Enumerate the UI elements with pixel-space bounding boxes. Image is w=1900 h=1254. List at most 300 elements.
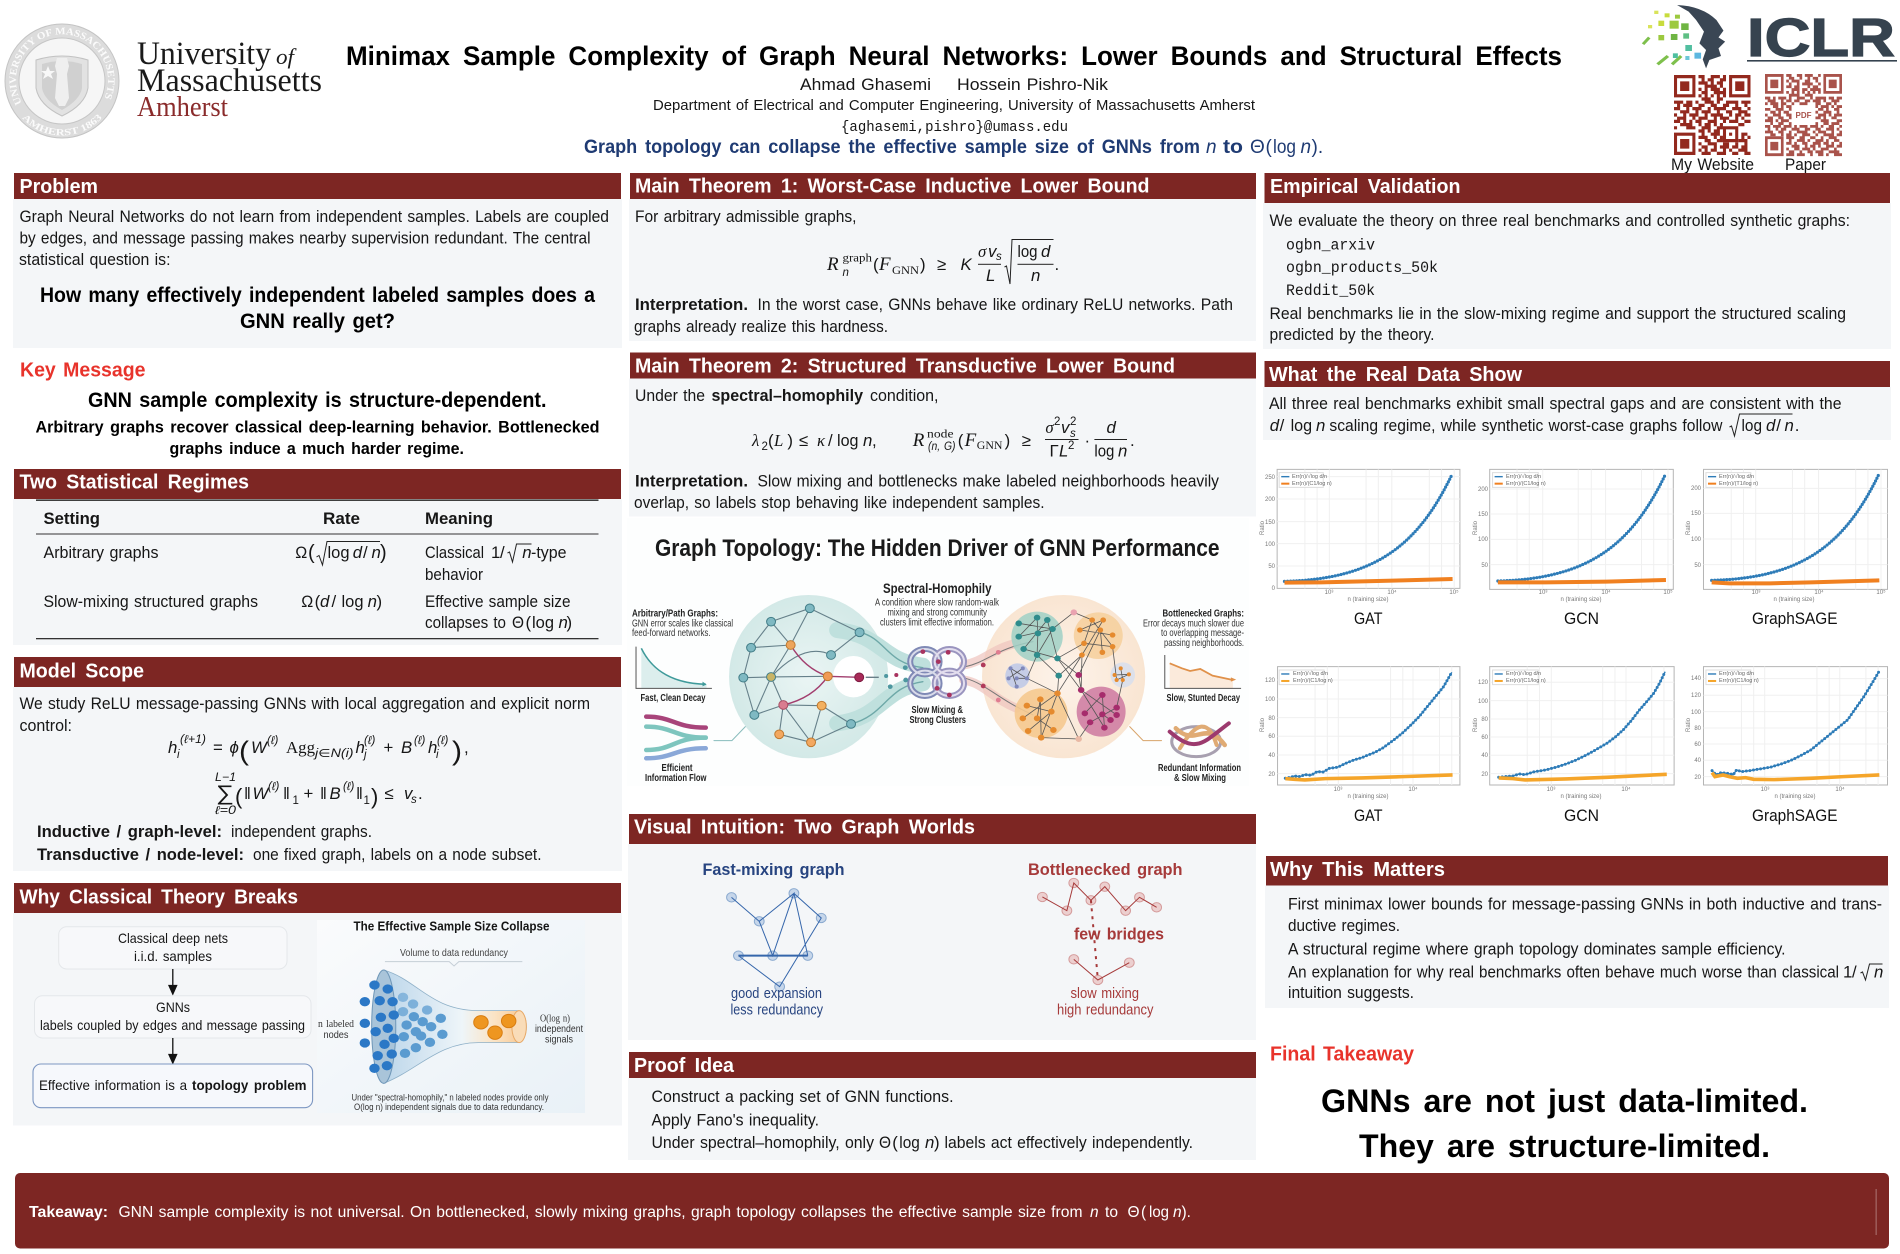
formula: structured lower bound: d bbox=[1106, 418, 1116, 437]
axis labels: 80 bbox=[1694, 726, 1702, 732]
formula: structured lower bound: L bbox=[1059, 442, 1068, 460]
formula: message passing update: (ℓ) bbox=[437, 735, 449, 747]
text: transductive setting bbox=[37, 845, 542, 864]
text: condition intro: spectral–homophily bbox=[712, 386, 864, 405]
left annotation: arbitrary path graphs: GNN error scales like classical bbox=[632, 618, 733, 630]
text: interpretation 1 bbox=[634, 295, 1233, 336]
footer text: n bbox=[1173, 1204, 1182, 1221]
table row: arbitrary graphs: -type bbox=[531, 543, 566, 562]
formula: message passing update: + bbox=[384, 738, 393, 757]
axis labels: 20 bbox=[1481, 772, 1489, 778]
axis labels bbox=[1260, 670, 1418, 800]
table row: slow-mixing graphs: ( bbox=[315, 592, 321, 611]
text: inductive setting: independent graphs. bbox=[231, 822, 372, 841]
tagline: Graph topology can collapse the effective sample size of GNNs from bbox=[584, 137, 1200, 158]
graph: bottlenecked bbox=[1028, 860, 1182, 1018]
text: inductive setting: Inductive / graph-level: bbox=[37, 822, 222, 841]
right annotation: bottlenecked graphs: Bottlenecked Graphs: bbox=[1162, 608, 1244, 620]
formula: spectral gap condition: κ bbox=[817, 431, 826, 450]
formula: worst-case lower bound: K bbox=[960, 255, 972, 274]
text: real data findings: n bbox=[1316, 416, 1325, 435]
text: reason 1: ductive regimes. bbox=[1288, 916, 1400, 935]
text: evaluation summary bbox=[1270, 304, 1846, 344]
axis labels bbox=[1260, 473, 1459, 603]
formula: worst-case lower bound: L bbox=[986, 266, 995, 285]
text: reason 1 bbox=[1288, 894, 1882, 935]
formula: structured lower bound: R bbox=[912, 430, 925, 451]
logo: University of Massachusetts Amherst wordmark bbox=[137, 36, 322, 123]
chart: GAT real data bbox=[1260, 469, 1460, 628]
axis labels: 50 bbox=[1694, 563, 1702, 569]
axis labels: n (training size) bbox=[1773, 597, 1815, 603]
panel: Model Scope bbox=[13, 657, 622, 871]
formula: worst-case lower bound: log bbox=[1018, 242, 1038, 261]
axis labels: Ratio bbox=[1260, 520, 1266, 535]
title: Minimax Sample Complexity of Graph Neural Networks: Lower Bounds and Structural Effects bbox=[346, 41, 1562, 71]
figure: Graph Topology the Hidden Driver bbox=[627, 518, 1249, 786]
tagline: to bbox=[1223, 137, 1243, 158]
heading: Final Takeaway: Final Takeaway bbox=[1270, 1042, 1415, 1066]
right annotation: bottlenecked graphs: passing neighborhoods. bbox=[1164, 637, 1244, 649]
formula: spectral gap condition: log bbox=[837, 431, 858, 450]
table row: arbitrary graphs: Classical bbox=[425, 543, 484, 562]
formula: structured lower bound: ) bbox=[1005, 431, 1010, 450]
axis labels: 40 bbox=[1481, 753, 1489, 759]
formula: norm constraint: ‖ bbox=[244, 784, 251, 803]
formula: message passing update: ( bbox=[239, 736, 249, 766]
formula: message passing update: (ℓ) bbox=[414, 735, 426, 747]
axis labels: Ratio bbox=[1260, 717, 1266, 732]
label: efficient information flow bbox=[645, 762, 707, 784]
text: real data findings: scaling regime, while synthetic worst-case graphs follow bbox=[1329, 416, 1723, 435]
email: {aghasemi,pishro}@umass.edu bbox=[841, 120, 1068, 136]
table: regimes bbox=[36, 500, 598, 639]
text: problem statement bbox=[19, 207, 609, 269]
left annotation: arbitrary path graphs: Arbitrary/Path Graphs: bbox=[632, 608, 718, 620]
formula: message passing update: h bbox=[356, 738, 365, 757]
text: interpretation 1: In the worst case, GNNs behave like ordinary ReLU networks. Path bbox=[758, 295, 1233, 314]
formula: structured lower bound: node bbox=[927, 428, 954, 440]
text: real data findings: d bbox=[1766, 416, 1776, 435]
QR code: My Website: My Website bbox=[1671, 155, 1754, 174]
QR code: Paper bbox=[1765, 74, 1842, 174]
list: benchmarks bbox=[1286, 236, 1438, 300]
formula: worst-case lower bound: GNN bbox=[892, 265, 920, 277]
text: interpretation 1: Interpretation. bbox=[635, 295, 748, 314]
logo: UMass seal: AMHERST 1863 bbox=[22, 114, 102, 136]
right annotation: bottlenecked graphs: Error decays much slower due bbox=[1143, 618, 1244, 630]
formula: spectral gap condition: 2 bbox=[762, 441, 768, 453]
formula: structured lower bound: F bbox=[964, 430, 977, 451]
axis labels: 50 bbox=[1481, 563, 1489, 569]
graph: fast-mixing: Fast-mixing graph bbox=[702, 860, 844, 879]
left annotation: arbitrary path graphs bbox=[632, 608, 733, 639]
axis labels: 100 bbox=[1265, 697, 1276, 703]
text: interpretation 2: Slow mixing and bottlenecks make labeled neighborhoods heavily bbox=[758, 472, 1220, 490]
logo: UMass seal: UNIVERSITY OF MASSACHUSETTS bbox=[10, 28, 115, 106]
formula: norm constraint: ‖ bbox=[283, 784, 290, 803]
formula: message passing update: W bbox=[251, 738, 269, 757]
panel: Final Takeaway bbox=[1270, 1042, 1808, 1164]
text: interpretation 1: graphs already realize this hardness. bbox=[634, 317, 888, 336]
QR code: Paper: PDF bbox=[1796, 111, 1812, 120]
text: evaluation intro: We evaluate the theory on three real benchmarks and controlled synthetic graphs: bbox=[1270, 211, 1850, 230]
tagline: ( bbox=[1266, 137, 1272, 158]
formula: norm constraint: ∑ bbox=[216, 782, 234, 805]
formula: structured lower bound: 2 bbox=[1070, 416, 1076, 428]
formula: worst-case lower bound: F bbox=[878, 254, 891, 275]
formula: message passing update: j bbox=[362, 749, 367, 761]
text: model description: control: bbox=[20, 716, 72, 735]
formula: message passing update: ) bbox=[452, 736, 462, 766]
axis labels: 80 bbox=[1268, 716, 1276, 722]
formula: norm constraint: ) bbox=[371, 784, 378, 809]
tagline: n bbox=[1300, 137, 1311, 158]
formula: norm constraint: ≤ bbox=[384, 784, 394, 803]
caption: GAT bbox=[1354, 609, 1382, 628]
table row: arbitrary graphs: n bbox=[372, 543, 381, 562]
table row: slow-mixing graphs: n bbox=[558, 613, 568, 632]
formula: norm constraint: . bbox=[418, 784, 423, 803]
axis labels: n (training size) bbox=[1347, 794, 1389, 800]
axis labels: 0 bbox=[1272, 586, 1276, 592]
callout: final statement bbox=[1321, 1083, 1808, 1164]
panel: Proof Idea bbox=[628, 1052, 1256, 1160]
formula: spectral gap condition: n bbox=[863, 431, 872, 450]
left network: fast mixing graph bbox=[739, 604, 879, 747]
logo: University of Massachusetts Amherst wordmark: Massachusetts bbox=[137, 63, 322, 99]
formula: spectral gap condition: / bbox=[828, 431, 833, 450]
axis labels bbox=[1686, 670, 1845, 800]
formula: spectral gap condition: ) bbox=[787, 431, 793, 450]
table row: slow-mixing graphs: Effective sample size bbox=[425, 592, 570, 611]
axis labels: 10³ bbox=[1761, 787, 1769, 793]
callout: central question: GNN really get? bbox=[240, 310, 395, 333]
formula: structured lower bound: Γ bbox=[1050, 442, 1059, 460]
formula: structured lower bound: v bbox=[1061, 418, 1071, 437]
table row: slow-mixing graphs: ( bbox=[526, 613, 532, 632]
table row: arbitrary graphs bbox=[44, 542, 566, 584]
formula: worst-case lower bound: d bbox=[1041, 242, 1051, 261]
text: interpretation 2: Interpretation. bbox=[635, 472, 748, 490]
central knot: slow mixing and strong clusters bbox=[884, 649, 1001, 702]
flow box: classical deep nets bbox=[59, 927, 287, 969]
formula: worst-case lower bound: ( bbox=[873, 255, 879, 274]
axis labels: 10⁵ bbox=[1876, 589, 1886, 596]
axis labels: 200 bbox=[1478, 487, 1489, 493]
formula: spectral gap condition: L bbox=[773, 431, 783, 450]
axis labels: 120 bbox=[1691, 693, 1702, 699]
axis labels: 10⁴ bbox=[1387, 589, 1397, 596]
axis labels: 100 bbox=[1691, 537, 1702, 543]
table header row: Meaning bbox=[425, 509, 493, 528]
heading: Problem: Problem bbox=[20, 175, 98, 198]
text: statement intro: For arbitrary admissible graphs, bbox=[635, 207, 856, 226]
text: condition intro: condition, bbox=[870, 386, 938, 405]
formula: worst-case lower bound: n bbox=[842, 267, 849, 279]
axis labels: 10⁴ bbox=[1835, 786, 1845, 793]
formula: norm constraint: + bbox=[304, 784, 313, 803]
label: slow stunted decay: Slow, Stunted Decay bbox=[1166, 692, 1240, 704]
text: proof step 3: Under spectral–homophily, only bbox=[652, 1133, 875, 1152]
heading: Visual Intuition: Visual Intuition: Two Graph Worlds bbox=[634, 816, 975, 839]
authors bbox=[800, 75, 1109, 94]
text: reason 3: / bbox=[1852, 962, 1857, 982]
left annotation: arbitrary path graphs: feed-forward networks. bbox=[632, 627, 710, 639]
heading: Why This Matters: Why This Matters bbox=[1270, 858, 1445, 881]
axis labels: 60 bbox=[1481, 735, 1489, 741]
axis labels: 50 bbox=[1268, 564, 1276, 570]
table header row: Rate bbox=[323, 509, 360, 528]
formula: norm constraint: B bbox=[330, 784, 341, 803]
text: problem statement: Graph Neural Networks do not learn from independent samples. Labels are coupled bbox=[20, 207, 609, 226]
authors: Ahmad Ghasemi bbox=[800, 75, 931, 94]
QR code: Paper: Paper bbox=[1785, 155, 1826, 174]
formula: structured lower bound: ≥ bbox=[1022, 431, 1031, 450]
text: real data findings: log bbox=[1742, 416, 1762, 435]
callout: final statement: They are structure-limited. bbox=[1359, 1128, 1770, 1164]
panel: Two Statistical Regimes bbox=[13, 469, 622, 645]
formula: spectral gap condition: ≤ bbox=[799, 431, 808, 450]
flow box: GNNs: GNNs bbox=[156, 999, 190, 1015]
axis labels: 120 bbox=[1478, 680, 1489, 686]
text: proof step 2: Apply Fano's inequality. bbox=[652, 1110, 819, 1130]
table row: arbitrary graphs: Arbitrary graphs bbox=[44, 543, 158, 562]
formula: norm constraint: W bbox=[252, 784, 270, 803]
text: problem statement: statistical question is: bbox=[19, 250, 170, 269]
table row: slow-mixing graphs: collapses to bbox=[425, 613, 506, 632]
axis labels: 10⁴ bbox=[1621, 786, 1631, 793]
tagline: n bbox=[1206, 137, 1217, 158]
orange independent signals bbox=[474, 1014, 516, 1039]
axis labels: Err(n)/(C1/log n) bbox=[1293, 678, 1333, 684]
axis labels: 150 bbox=[1691, 511, 1702, 517]
formula: norm constraint: L−1 bbox=[215, 772, 236, 784]
formula: norm constraint: ℓ=0 bbox=[214, 805, 237, 817]
central heading: Spectral-Homophily: clusters limit effective information. bbox=[880, 616, 994, 628]
formula: structured lower bound: GNN bbox=[977, 440, 1003, 452]
axis labels: Ratio bbox=[1686, 520, 1692, 535]
graph: bottlenecked: slow mixing bbox=[1070, 986, 1139, 1002]
text: proof step 3: Θ bbox=[879, 1133, 891, 1152]
table row: arbitrary graphs: log bbox=[328, 543, 350, 562]
table row: slow-mixing graphs: log bbox=[342, 592, 364, 611]
callout: central question bbox=[40, 284, 595, 333]
formula: worst-case lower bound: R bbox=[826, 254, 839, 275]
graph: bottlenecked: few bridges bbox=[1074, 924, 1164, 944]
footer text: to bbox=[1105, 1204, 1118, 1221]
graph: bottlenecked: high redundancy bbox=[1057, 1002, 1154, 1018]
label: O(log n) independent signals: O(log n) bbox=[540, 1012, 570, 1024]
text: inductive setting bbox=[37, 822, 372, 841]
axis labels: 20 bbox=[1694, 775, 1702, 781]
formula: norm constraint: ‖ bbox=[320, 784, 327, 803]
formula: structured lower bound: . bbox=[1130, 431, 1135, 450]
axis labels: 10³ bbox=[1539, 590, 1547, 596]
text: key message detail: Arbitrary graphs recover classical deep-learning behavior. Bottlenecked bbox=[36, 418, 600, 436]
footer text: Takeaway: bbox=[29, 1204, 108, 1221]
formula: worst-case lower bound bbox=[826, 240, 1059, 285]
figure caption bbox=[352, 1092, 549, 1113]
icon: redundant information knot bbox=[1130, 723, 1229, 757]
label: n labeled nodes: nodes bbox=[324, 1029, 348, 1041]
text: proof step 3: ( bbox=[892, 1133, 898, 1152]
heading: Model Scope: Model Scope bbox=[20, 660, 144, 683]
formula: worst-case lower bound: ≥ bbox=[937, 255, 946, 274]
axis labels: 10³ bbox=[1547, 787, 1555, 793]
text: real data findings: . bbox=[1795, 416, 1799, 435]
axis labels: 100 bbox=[1265, 542, 1276, 548]
graph: fast-mixing bbox=[702, 860, 844, 1018]
axis labels: 20 bbox=[1268, 772, 1276, 778]
text: problem statement: by edges, and message passing makes nearby supervision redundant. The central bbox=[20, 228, 590, 248]
heading: Main Theorem 1: Main Theorem 1: Worst-Case Inductive Lower Bound bbox=[635, 175, 1150, 198]
label: efficient information flow: Efficient bbox=[662, 762, 693, 774]
table row: arbitrary graphs: ) bbox=[380, 542, 387, 564]
central heading: Spectral-Homophily bbox=[875, 581, 1000, 628]
heading: What the Real Data Show: What the Real Data Show bbox=[1269, 363, 1522, 386]
figure caption: O(log n) independent signals due to data redundancy. bbox=[354, 1102, 544, 1113]
heading: Main Theorem 2: Main Theorem 2: Structured Transductive Lower Bound bbox=[635, 355, 1175, 378]
formula: structured lower bound: ( bbox=[958, 431, 964, 450]
table row: slow-mixing graphs: Θ bbox=[512, 613, 524, 632]
formula: norm constraint: 1 bbox=[364, 795, 370, 807]
axis labels: n (training size) bbox=[1560, 597, 1602, 603]
graph: bottlenecked: Bottlenecked graph bbox=[1028, 860, 1182, 879]
panel: Problem bbox=[13, 173, 622, 348]
table row: slow-mixing graphs: d bbox=[320, 592, 330, 611]
axis labels: 150 bbox=[1265, 520, 1276, 526]
axis labels: 40 bbox=[1268, 753, 1276, 759]
label: n labeled nodes bbox=[318, 1019, 355, 1041]
text: reason 3: n bbox=[1874, 962, 1883, 982]
QR code: My Website bbox=[1671, 75, 1754, 174]
heading: Why Classical Theory Breaks: Why Classical Theory Breaks bbox=[20, 886, 298, 909]
formula: structured lower bound: σ bbox=[1045, 418, 1054, 437]
chart: GAT synthetic bbox=[1260, 667, 1460, 825]
table row: slow-mixing graphs: ) bbox=[566, 613, 572, 632]
table row: slow-mixing graphs: n bbox=[368, 592, 377, 611]
axis labels: 10³ bbox=[1325, 590, 1333, 596]
formula: structured lower bound: log bbox=[1094, 442, 1114, 460]
text: real data findings: log bbox=[1291, 416, 1312, 435]
formula: norm constraint: 1 bbox=[292, 795, 299, 807]
formula: worst-case lower bound: ) bbox=[920, 255, 926, 274]
text: proof step 3: log bbox=[899, 1133, 920, 1152]
figure caption: Under "spectral-homophily," n labeled nodes provide only bbox=[352, 1092, 549, 1104]
axis labels: 10⁴ bbox=[1601, 589, 1611, 596]
axis labels: 100 bbox=[1478, 537, 1489, 543]
authors: Hossein Pishro-Nik bbox=[957, 75, 1109, 94]
arrow: GNNs to topology bbox=[169, 1038, 177, 1063]
formula: norm constraint bbox=[214, 772, 423, 817]
text: real data findings: / bbox=[1280, 416, 1285, 435]
axis labels: 100 bbox=[1478, 699, 1489, 705]
formula: norm constraint: (ℓ) bbox=[343, 781, 355, 793]
table row: arbitrary graphs: ( bbox=[308, 542, 315, 564]
caption: GraphSAGE bbox=[1752, 609, 1838, 628]
table row: arbitrary graphs: d bbox=[353, 543, 363, 562]
text: key message detail: graphs induce a much harder regime. bbox=[170, 439, 464, 458]
text: real data findings: / bbox=[1776, 416, 1781, 435]
axis labels: n (training size) bbox=[1347, 597, 1389, 603]
list: benchmarks: Reddit_50k bbox=[1286, 282, 1375, 300]
list: benchmarks: ogbn_products_50k bbox=[1286, 259, 1438, 277]
label: redundant information bbox=[1158, 762, 1241, 784]
affiliation: Department of Electrical and Computer Engineering, University of Massachusetts Amherst bbox=[653, 97, 1256, 114]
axis labels: Err(n)/√log d/n bbox=[1292, 473, 1327, 480]
formula: message passing update: h bbox=[428, 738, 437, 757]
text: transductive setting: one fixed graph, labels on a node subset. bbox=[253, 845, 542, 864]
formula: spectral gap condition: λ bbox=[751, 431, 759, 450]
formula: norm constraint: ‖ bbox=[356, 784, 363, 803]
list: benchmarks: ogbn_arxiv bbox=[1286, 236, 1375, 254]
axis labels: Err(n)/(C1/log n) bbox=[1292, 481, 1332, 487]
logo: University of Massachusetts Amherst wordmark: of bbox=[276, 44, 297, 69]
text: model description bbox=[20, 694, 590, 735]
logo: University of Massachusetts Amherst wordmark: Amherst bbox=[137, 92, 228, 123]
table row: slow-mixing graphs bbox=[44, 592, 572, 632]
formula: structured lower bound: · bbox=[1084, 431, 1090, 450]
table row: slow-mixing graphs: ) bbox=[376, 592, 382, 611]
panel: Why Classical Theory Breaks bbox=[13, 883, 622, 1126]
table row: arbitrary graphs: / bbox=[363, 543, 368, 562]
figure title: The Effective Sample Size Collapse bbox=[354, 918, 550, 934]
formula: message passing update: i bbox=[177, 749, 180, 761]
heading: Empirical Validation: Empirical Validation bbox=[1270, 175, 1460, 198]
logo: University of Massachusetts Amherst wordmark: University bbox=[137, 36, 271, 72]
tagline: Θ bbox=[1250, 137, 1265, 158]
table row: arbitrary graphs: 1 bbox=[491, 543, 500, 562]
formula: worst-case lower bound: σ bbox=[978, 242, 987, 261]
text: condition intro bbox=[635, 386, 938, 405]
formula: structured lower bound: 2 bbox=[1054, 416, 1060, 428]
table row: slow-mixing graphs: Ω bbox=[301, 592, 313, 611]
axis labels: 80 bbox=[1481, 717, 1489, 723]
axis labels: 150 bbox=[1478, 512, 1489, 518]
formula: norm constraint: v bbox=[404, 784, 414, 803]
text: reason 3: An explanation for why real benchmarks often behave much worse than classical bbox=[1288, 962, 1839, 982]
table row: arbitrary graphs: / bbox=[500, 543, 505, 562]
text: key message detail bbox=[36, 418, 600, 458]
graph: fast-mixing: good expansion bbox=[731, 986, 822, 1002]
table row: arbitrary graphs: behavior bbox=[425, 565, 483, 584]
central heading: Spectral-Homophily: A condition where slow random-walk bbox=[875, 596, 1000, 608]
formula: message passing update: (ℓ) bbox=[267, 735, 279, 747]
funnel annotation: Volume to data redundancy bbox=[400, 947, 509, 959]
label: slow mixing and strong clusters: Slow Mixing & bbox=[912, 704, 963, 716]
footer text: ). bbox=[1182, 1204, 1191, 1221]
footer bar: takeaway bbox=[15, 1173, 1889, 1248]
axis labels: 10⁵ bbox=[1449, 589, 1459, 596]
arrow: deep nets to GNNs bbox=[169, 969, 177, 994]
formula: worst-case lower bound: . bbox=[1054, 255, 1059, 274]
flow box: topology problem bbox=[33, 1064, 313, 1108]
flow box: topology problem: topology problem bbox=[192, 1077, 306, 1093]
axis labels: 200 bbox=[1265, 497, 1276, 503]
formula: message passing update: ϕ bbox=[230, 738, 239, 757]
label: slow mixing and strong clusters bbox=[910, 704, 966, 726]
axis labels: 10⁵ bbox=[1663, 589, 1673, 596]
formula: spectral gap condition: , bbox=[872, 431, 877, 450]
flow box: topology problem: Effective information is a bbox=[39, 1077, 187, 1093]
axis labels: Err(n)/√log d/n bbox=[1293, 670, 1328, 677]
heading: Proof Idea: Proof Idea bbox=[634, 1054, 735, 1077]
footer text: Θ bbox=[1128, 1204, 1140, 1221]
blue labeled nodes bbox=[360, 980, 448, 1073]
table header row: Setting bbox=[44, 509, 100, 528]
text: reason 3: intuition suggests. bbox=[1288, 983, 1414, 1002]
